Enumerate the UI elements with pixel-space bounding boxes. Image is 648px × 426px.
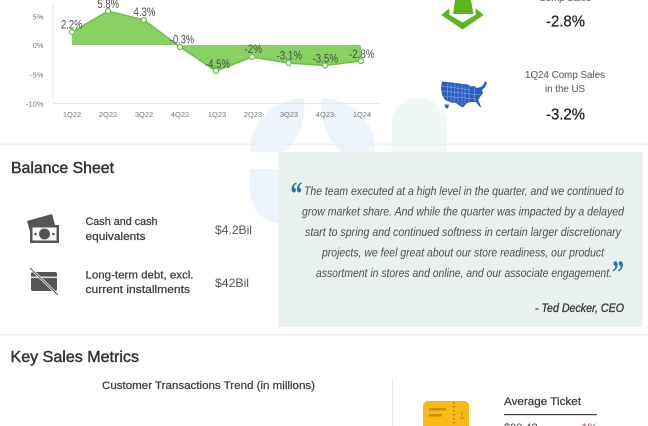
quote text: assortment in stores and online, and our associate engagement. xyxy=(316,268,612,280)
x axis labels: 4Q23 xyxy=(316,110,334,119)
background watermark shapes xyxy=(250,98,447,223)
text: debt label: current installments xyxy=(86,284,191,296)
y axis labels: 0% xyxy=(33,41,44,50)
panel: CEO quote xyxy=(278,152,642,327)
close quote mark: ” xyxy=(612,255,624,292)
vertical divider xyxy=(392,378,393,426)
data labels: -2% xyxy=(244,44,262,56)
heading: key sales metrics: Key Sales Metrics xyxy=(10,349,139,366)
text: cash label: Cash and cash xyxy=(86,216,158,228)
area fill xyxy=(72,11,361,71)
quote text: grow market share. And while the quarter was impacted by a delayed xyxy=(302,206,625,218)
y axis labels: -5% xyxy=(30,71,44,80)
heading: balance sheet: Balance Sheet xyxy=(11,160,115,177)
data labels: -0.3% xyxy=(170,34,194,46)
stat: comp sales US: 1Q24 Comp Sales xyxy=(525,69,605,81)
trend line xyxy=(72,11,361,71)
line chart: comp sales trend xyxy=(26,0,380,119)
icon: cash xyxy=(27,214,59,243)
section divider middle xyxy=(0,334,648,336)
quote text xyxy=(302,186,625,280)
text: cash label xyxy=(86,216,158,243)
x axis labels xyxy=(63,110,371,119)
data labels: -3.1% xyxy=(276,50,302,62)
quote text: projects, we feel great about our store readiness, our product xyxy=(321,248,605,260)
metric: average ticket xyxy=(504,396,598,426)
data points xyxy=(70,8,364,74)
section divider top xyxy=(0,144,648,145)
x axis labels: 4Q22 xyxy=(171,110,189,119)
icon: US map xyxy=(441,81,487,108)
y axis labels: 5% xyxy=(33,13,44,22)
x axis labels: 1Q22 xyxy=(63,110,81,119)
x axis labels: 1Q23 xyxy=(208,110,226,119)
stat: comp sales US: -3.2% xyxy=(546,106,585,124)
y axis labels: -10% xyxy=(26,100,44,109)
stat: comp sales US xyxy=(525,69,605,124)
icon: ticket xyxy=(423,401,469,426)
value: debt: $42Bil xyxy=(215,276,249,290)
text: cash label: equivalents xyxy=(86,231,146,243)
quote text: The team executed at a high level in the quarter, and we continued to xyxy=(304,186,625,198)
text: debt label: Long-term debt, excl. xyxy=(86,270,194,282)
stat: comp sales US: in the US xyxy=(545,83,585,95)
icon: ticket: 1 xyxy=(459,410,465,422)
data labels: -3.5% xyxy=(312,54,338,66)
stat: comp sales xyxy=(539,0,591,30)
metric: average ticket: Average Ticket xyxy=(504,396,581,408)
data labels: 4.3% xyxy=(134,7,156,19)
x axis labels: 1Q24 xyxy=(353,110,371,119)
data labels: -4.5% xyxy=(205,59,230,71)
icon: crossed credit card xyxy=(30,268,58,295)
x axis labels: 3Q23 xyxy=(280,110,298,119)
quote text: start to spring and continued softness in certain larger discretionary xyxy=(305,227,622,239)
y axis labels xyxy=(26,13,44,109)
stat: comp sales: -2.8% xyxy=(546,14,585,30)
data labels: -2.8% xyxy=(349,49,374,61)
value: cash: $4.2Bil xyxy=(215,223,252,237)
x axis labels: 3Q22 xyxy=(135,110,153,119)
attribution: - Ted Decker, CEO xyxy=(535,301,624,315)
x axis labels: 2Q23 xyxy=(244,110,262,119)
data labels xyxy=(61,0,374,71)
icon: green shopping bag xyxy=(442,0,483,29)
open quote mark: “ xyxy=(290,176,302,213)
data labels: 2.2% xyxy=(61,20,82,32)
x axis labels: 2Q22 xyxy=(99,110,117,119)
chart title: customer transactions: Customer Transactions Trend (in millions) xyxy=(102,380,315,392)
text: debt label xyxy=(86,270,194,296)
